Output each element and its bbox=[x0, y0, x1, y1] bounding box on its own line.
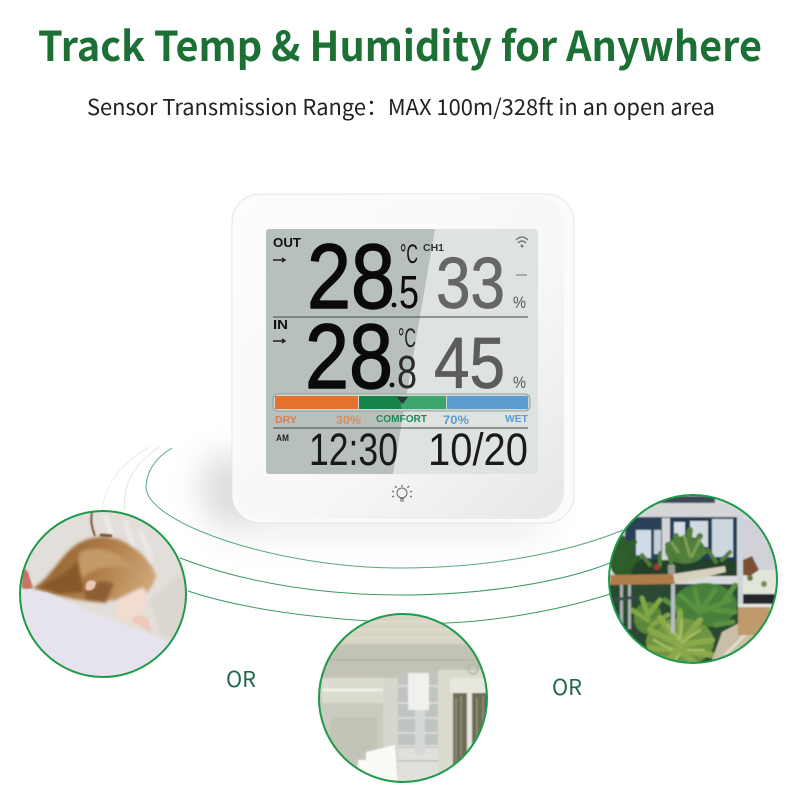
70% label: 70% bbox=[443, 415, 469, 427]
screen shaded area bbox=[266, 229, 435, 474]
indoor humidity: 45 bbox=[434, 324, 505, 404]
circle photo: greenhouse plants bbox=[608, 494, 778, 664]
signal arcs bbox=[102, 447, 623, 623]
IN label: IN bbox=[273, 317, 288, 332]
OUT label: OUT bbox=[273, 235, 301, 250]
wifi icon bbox=[516, 237, 528, 247]
circle photo: sensor on house wall bbox=[318, 613, 488, 783]
OR label right: OR bbox=[552, 670, 582, 702]
outdoor temperature: 28 bbox=[307, 226, 395, 328]
title: Track Temp & Humidity for Anywhere bbox=[38, 13, 762, 73]
device body bbox=[232, 194, 574, 523]
OR label left: OR bbox=[226, 662, 256, 694]
date: 10/20 bbox=[428, 424, 528, 475]
indoor temperature: 28 bbox=[305, 306, 393, 408]
indoor temperature dot bbox=[390, 383, 394, 387]
DRY label: DRY bbox=[275, 415, 297, 426]
divider bbox=[273, 427, 528, 429]
30% label: 30% bbox=[336, 415, 361, 427]
outdoor humidity: 33 bbox=[436, 244, 505, 324]
channel label: CH1 bbox=[423, 242, 444, 254]
indoor percent: % bbox=[513, 373, 526, 392]
indoor temperature decimal: 8 bbox=[397, 346, 417, 398]
divider bbox=[273, 316, 528, 318]
device shadow bbox=[200, 455, 550, 540]
LCD screen bbox=[266, 229, 538, 474]
WET label: WET bbox=[505, 414, 528, 425]
AM label: AM bbox=[276, 433, 289, 443]
comfort bar bbox=[273, 394, 530, 411]
icon: light bulb bbox=[392, 485, 412, 501]
time: 12:30 bbox=[309, 424, 398, 475]
outdoor temperature decimal: 5 bbox=[399, 266, 419, 318]
out arrow bbox=[273, 258, 285, 262]
screen background bbox=[393, 229, 538, 474]
circle photo: child sleeping bbox=[19, 510, 187, 678]
in arrow bbox=[273, 339, 285, 343]
thermometer device bbox=[232, 194, 574, 523]
subtitle: sensor range: Sensor Transmission Range：MAX 100m/328ft in an open area bbox=[87, 90, 715, 122]
inner face bbox=[234, 196, 564, 519]
indoor celsius: °C bbox=[398, 323, 416, 353]
outdoor temperature dot bbox=[392, 303, 396, 307]
COMFORT label: COMFORT bbox=[376, 414, 427, 425]
outdoor celsius: °C bbox=[400, 239, 418, 269]
outdoor percent: % bbox=[513, 293, 526, 312]
outdoor trend arrow bbox=[516, 274, 527, 276]
